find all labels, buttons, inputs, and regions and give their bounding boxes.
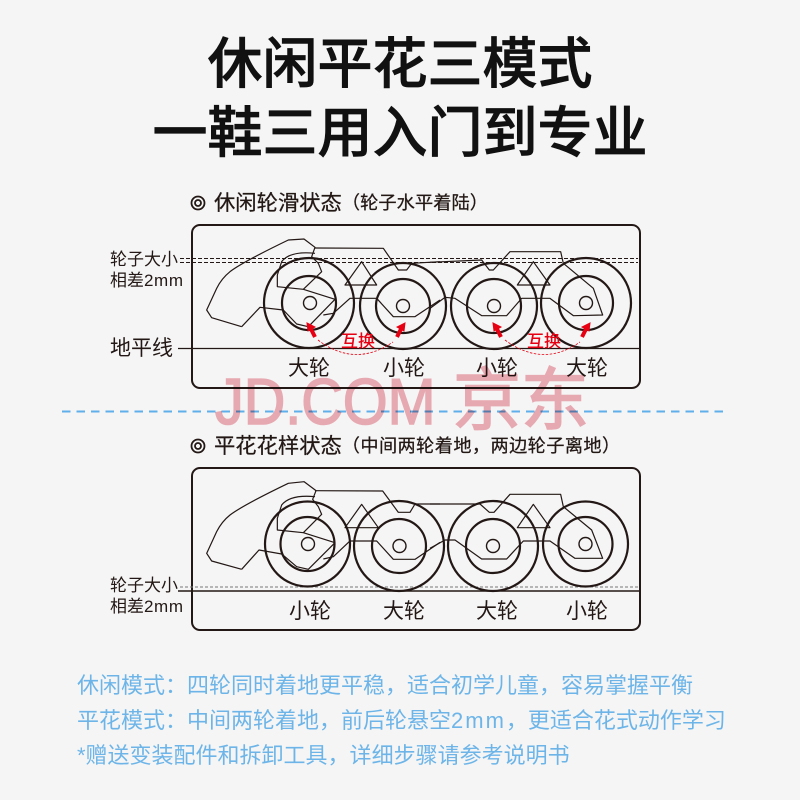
- swap arrow: right pair: [493, 323, 590, 355]
- wheel labels: casual row: 小轮: [476, 357, 518, 380]
- watermark: [215, 363, 589, 439]
- label: wheel size difference, bottom: 轮子大小: [110, 576, 178, 595]
- label: horizon: 地平线: [110, 337, 173, 360]
- notes text: 休闲模式：四轮同时着地更平稳，适合初学儿童，容易掌握平衡: [77, 673, 693, 698]
- notes text: [77, 673, 726, 768]
- wheel labels: slalom row: 大轮: [476, 600, 518, 623]
- wheel: small 3: [451, 263, 537, 349]
- dashed divider: [62, 410, 728, 412]
- label: wheel size difference, bottom: [110, 576, 184, 616]
- watermark: JD.COM: [215, 365, 436, 438]
- wheel: large 2: [354, 501, 444, 591]
- wheel: small 4: [543, 502, 628, 586]
- notes text: *赠送变装配件和拆卸工具，详细步骤请参考说明书: [77, 743, 570, 768]
- wheel labels: casual row: [288, 357, 608, 380]
- dashed reference lines: [180, 258, 638, 262]
- wheel labels: casual row: 大轮: [288, 357, 330, 380]
- title: [152, 33, 648, 164]
- wheel: large 1: [264, 258, 354, 348]
- label: wheel size difference, top: [110, 250, 184, 290]
- skate outline: [207, 482, 603, 569]
- watermark: 京东: [453, 363, 589, 439]
- wheel labels: slalom row: 小轮: [566, 600, 608, 623]
- label: wheel size difference, top: 相差2mm: [110, 271, 184, 290]
- wheel: small 2: [360, 263, 446, 349]
- horizon line: [178, 348, 640, 350]
- title: 休闲平花三模式: [207, 33, 592, 95]
- label: wheel size difference, bottom: 相差2mm: [110, 597, 184, 616]
- heading: casual mode: 休闲轮滑状态（轮子水平着陆）: [214, 191, 488, 215]
- label: wheel size difference, top: 轮子大小: [110, 250, 178, 269]
- wheel labels: casual row: 小轮: [383, 357, 425, 380]
- panel: casual mode diagram: [178, 225, 640, 388]
- wheel: small 1: [265, 502, 350, 586]
- icon: slalom heading bullet: [192, 440, 204, 452]
- ground line: [178, 590, 640, 592]
- wheel labels: slalom row: 小轮: [289, 600, 331, 623]
- wheel labels: slalom row: [289, 600, 608, 623]
- swap label left: 互换: [341, 332, 375, 351]
- panel: slalom mode diagram: [178, 468, 640, 630]
- wheel labels: casual row: 大轮: [566, 357, 608, 380]
- wheel: large 4: [541, 258, 631, 348]
- skate outline: [207, 239, 603, 327]
- dashed reference line: [180, 586, 638, 588]
- notes text: 平花模式：中间两轮着地，前后轮悬空2mm，更适合花式动作学习: [77, 708, 726, 733]
- wheel labels: slalom row: 大轮: [383, 600, 425, 623]
- swap label right: 互换: [527, 332, 561, 351]
- heading: slalom mode: 平花花样状态（中间两轮着地，两边轮子离地）: [214, 434, 621, 458]
- title: 一鞋三用入门到专业: [152, 102, 648, 164]
- wheel: large 3: [448, 501, 538, 591]
- icon: casual heading bullet: [192, 196, 204, 210]
- swap arrow: left pair: [307, 323, 405, 355]
